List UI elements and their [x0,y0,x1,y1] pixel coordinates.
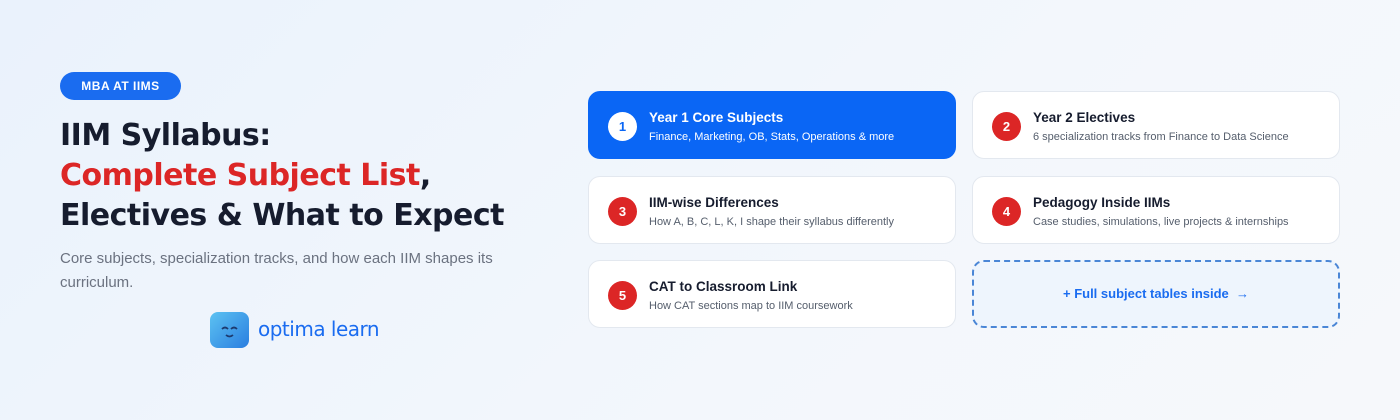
card 5: How CAT sections map to IIM coursework [649,300,853,312]
card 5: CAT to Classroom Link [649,279,797,294]
title: Complete Subject List, [60,158,431,193]
card 3 [588,176,956,244]
card 4 [972,176,1340,244]
card 5: 5 [619,288,626,303]
card 4: 4 [1003,204,1010,219]
card 2: Year 2 Electives [1033,110,1135,125]
subtitle: Core subjects, specialization tracks, and how each IIM shapes its curriculum. [60,250,493,291]
card 1: Finance, Marketing, OB, Stats, Operations & more [649,131,894,143]
card 5 [588,260,956,328]
title: Electives & What to Expect [60,198,504,233]
card 3: IIM-wise Differences [649,195,779,210]
card 4: Case studies, simulations, live projects & internships [1033,216,1289,228]
card 3: How A, B, C, L, K, I shape their syllabus differently [649,216,894,228]
callout: full subject tables [972,260,1340,328]
badge: MBA AT IIMS [81,79,160,93]
logo: optima learn: optima learn [258,317,379,341]
title [60,118,504,233]
card 2: 6 specialization tracks from Finance to Data Science [1033,131,1289,143]
card 2 [972,91,1340,159]
logo: optima learn [210,312,379,348]
card 4: Pedagogy Inside IIMs [1033,195,1170,210]
callout: full subject tables: + Full subject tables inside → [1063,286,1249,301]
card 2: 2 [1003,119,1010,134]
card 1: Year 1 Core Subjects [649,110,783,125]
card 1 [588,91,956,159]
badge [60,72,181,100]
card 3: 3 [619,204,626,219]
card 1: 1 [619,119,626,134]
title: IIM Syllabus: [60,118,271,153]
